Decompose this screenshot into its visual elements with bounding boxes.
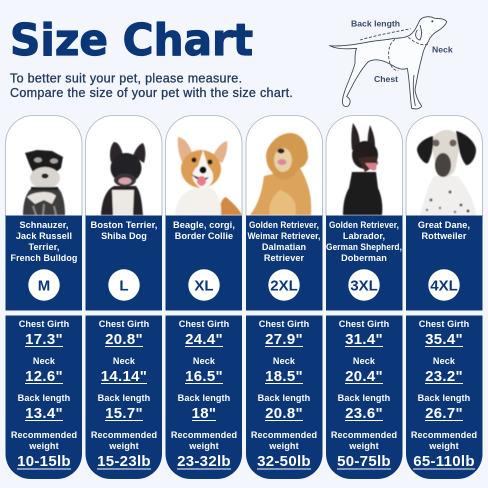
column: XL — [166, 115, 242, 479]
breed text — [10, 220, 78, 263]
measurement values: 32-50lb — [257, 453, 311, 470]
measurement values: 12.6" — [25, 368, 63, 385]
measurement values: weight — [28, 441, 59, 451]
measurement values — [91, 319, 157, 470]
measurement values: 50-75lb — [337, 453, 391, 470]
measurement values: weight — [348, 441, 379, 451]
measurement values: Back length — [178, 393, 230, 403]
measurement values: Back length — [338, 393, 390, 403]
size badge — [428, 269, 460, 301]
measurement values: weight — [428, 441, 459, 451]
measurement values — [11, 319, 77, 470]
measurement values: Recommended — [171, 430, 237, 440]
measurement values: weight — [268, 441, 299, 451]
photo: corgi — [175, 137, 242, 215]
measurement values: Back length — [418, 393, 470, 403]
measurement values: Recommended — [251, 430, 317, 440]
measurement values: 23.6" — [345, 405, 383, 422]
photo: golden retriever — [250, 133, 311, 215]
panel: L breed and size — [86, 216, 162, 310]
breed text: Shiba Dog — [101, 231, 147, 241]
breed text — [90, 220, 158, 241]
measurement values: 26.7" — [425, 405, 463, 422]
panel: XL breed and size — [166, 216, 242, 310]
measurement values: 23-32lb — [177, 453, 231, 470]
measurement values: Recommended — [411, 430, 477, 440]
measurement values: 65-110lb — [413, 453, 475, 470]
size badge: 4XL — [430, 278, 458, 294]
measurement values: 15.7" — [105, 405, 143, 422]
measurement values — [171, 319, 237, 470]
measurement values: Neck — [33, 356, 56, 366]
column: L — [86, 115, 162, 479]
panel: 3XL photo card — [326, 115, 402, 216]
panel: XL photo card — [166, 115, 242, 216]
panel: 4XL breed and size — [406, 216, 482, 310]
title: Size Chart — [10, 15, 253, 66]
panel: XL measurements — [166, 316, 242, 479]
panel: 2XL breed and size — [246, 216, 322, 310]
size badge: M — [38, 278, 50, 294]
measurement values: Back length — [18, 393, 70, 403]
measurement values: 31.4" — [345, 331, 383, 348]
measurement values: 13.4" — [25, 405, 63, 422]
photo: french bulldog — [101, 142, 145, 215]
measurement values: Chest Girth — [259, 319, 309, 329]
measurement values: Chest Girth — [339, 319, 389, 329]
breed text: Schnauzer, — [19, 220, 69, 230]
measuring diagram: dog outline: Neck — [432, 44, 453, 54]
column: M — [6, 115, 82, 479]
column: 3XL — [326, 115, 402, 479]
breed text: Retriever — [264, 253, 305, 263]
photo: schnauzer — [23, 150, 65, 215]
panel: 4XL photo card — [406, 115, 482, 216]
breed text: Golden Retriever, — [249, 220, 319, 230]
size badge: L — [119, 278, 129, 294]
size badge — [188, 269, 220, 301]
breed text — [248, 220, 320, 263]
size badge — [108, 269, 140, 301]
measurement values: Chest Girth — [19, 319, 69, 329]
measurement values: Recommended — [331, 430, 397, 440]
measurement values: 10-15lb — [17, 453, 71, 470]
breed text: Golden Retriever, — [329, 220, 399, 230]
measuring diagram: dog outline: Chest — [374, 74, 398, 84]
breed text: Beagle, corgi, — [173, 220, 235, 230]
measurement values: Neck — [433, 356, 456, 366]
measurement values: Back length — [258, 393, 310, 403]
breed text: Great Dane, — [418, 220, 470, 230]
measurement values: 23.2" — [425, 368, 463, 385]
size badge — [28, 269, 60, 301]
breed text: Border Collie — [175, 231, 233, 241]
measurement values: Chest Girth — [99, 319, 149, 329]
breed text: Boston Terrier, — [90, 220, 158, 230]
measurement values: 18.5" — [265, 368, 303, 385]
panel: 2XL measurements — [246, 316, 322, 479]
photo: great dane — [417, 130, 476, 215]
measurement values — [331, 319, 397, 470]
measurement values: Neck — [273, 356, 296, 366]
size badge — [268, 269, 300, 301]
breed text — [418, 220, 470, 241]
measurement values: Recommended — [11, 430, 77, 440]
breed text — [173, 220, 235, 241]
breed text: Terrier, — [29, 242, 59, 252]
size badge: 3XL — [350, 278, 378, 294]
subtitle text: To better suit your pet, please measure. — [10, 72, 242, 86]
measurement values: Chest Girth — [179, 319, 229, 329]
measurement values: 20.8" — [105, 331, 143, 348]
measurement values: 35.4" — [425, 331, 463, 348]
measurement values: 14.14" — [101, 368, 147, 385]
measurement values: 20.4" — [345, 368, 383, 385]
panel: 3XL breed and size — [326, 216, 402, 310]
panel: 3XL measurements — [326, 316, 402, 479]
subtitle text: Compare the size of your pet with the size chart. — [10, 86, 293, 100]
photo: doberman — [343, 123, 382, 215]
measurement values: weight — [108, 441, 139, 451]
panel: M photo card — [6, 115, 82, 216]
measurement values: Back length — [98, 393, 150, 403]
subtitle text — [10, 72, 293, 100]
measurement values: Neck — [353, 356, 376, 366]
breed text: Labrador, — [343, 231, 385, 241]
breed text: German Shepherd, — [326, 242, 402, 252]
breed text: French Bulldog — [10, 253, 78, 263]
measurement values: 15-23lb — [97, 453, 151, 470]
measuring diagram: dog outline: Back length — [351, 19, 400, 29]
measurement values: 18" — [192, 405, 216, 422]
measurement values: weight — [188, 441, 219, 451]
size badge: 2XL — [270, 278, 298, 294]
size badge — [348, 269, 380, 301]
panel: 4XL measurements — [406, 316, 482, 479]
breed text: Doberman — [341, 253, 387, 263]
measurement values: 16.5" — [185, 368, 223, 385]
measurement values: 27.9" — [265, 331, 303, 348]
measuring diagram: dog outline — [329, 17, 453, 109]
measurement values: Neck — [193, 356, 216, 366]
panel: M measurements — [6, 316, 82, 479]
panel: L measurements — [86, 316, 162, 479]
breed text: Rottweiler — [422, 231, 467, 241]
measurement values: 20.8" — [265, 405, 303, 422]
column: 4XL — [406, 115, 482, 479]
size badge: XL — [194, 278, 214, 294]
panel: L photo card — [86, 115, 162, 216]
measurement values — [251, 319, 317, 470]
breed text — [326, 220, 402, 263]
measurement values: Chest Girth — [419, 319, 469, 329]
column: 2XL — [246, 115, 322, 479]
panel: M breed and size — [6, 216, 82, 310]
panel: 2XL photo card — [246, 115, 322, 216]
measurement values: Recommended — [91, 430, 157, 440]
measurement values: 17.3" — [25, 331, 63, 348]
measurement values: Neck — [113, 356, 136, 366]
measurement values: 24.4" — [185, 331, 223, 348]
breed text: Dalmatian — [262, 242, 306, 252]
measurement values — [411, 319, 477, 470]
breed text: Weimar Retriever, — [248, 231, 320, 241]
breed text: Jack Russell — [16, 231, 72, 241]
